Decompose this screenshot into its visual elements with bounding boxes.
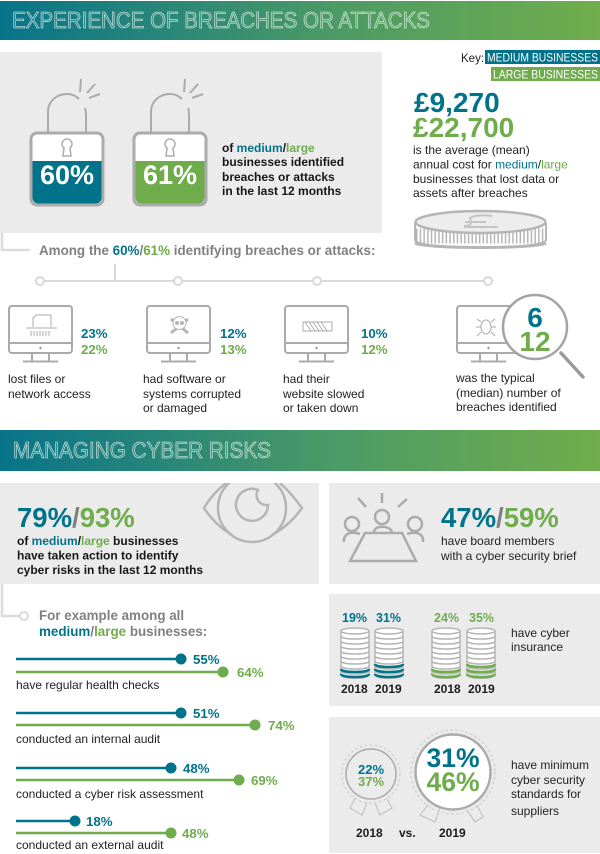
key: Key: [461,53,484,65]
text: share identifying breaches: breaches or attacks [222,170,335,184]
connector: panel to examples [2,584,28,620]
item: website slowed: or taken down [283,401,358,415]
item: median breaches [455,295,583,414]
subheading: for example: medium/large businesses: [39,624,207,639]
chart: external audit: 18% [86,814,113,829]
item: software corrupted: 12% [220,326,247,341]
rosette year labels [356,826,466,840]
text: average cost description: assets after breaches [413,186,528,200]
icon: padlock 60% [31,79,103,205]
chart: internal audit [16,706,295,746]
average cost figures [413,87,514,143]
item: software corrupted: had software or [143,372,226,386]
chart: external audit [16,814,209,852]
icon: rosette 2019: 46% [426,767,480,797]
banner title: MANAGING CYBER RISKS [13,437,271,463]
icon: rosette 2018 [342,745,400,815]
icon: rosette 2018: 22% [358,762,384,777]
icon: rosette 2019: 31% [426,743,480,773]
text: average cost description: is the average (mean) [413,143,530,157]
text: action description: cyber risks in the last 12 months [17,563,203,577]
text: board description: with a cyber security brief [440,549,577,563]
timeline connector [36,264,492,285]
icon: eye [204,474,302,542]
item: website slowed: 10% [361,326,388,341]
icon: magnifier with medians: 6 [527,302,543,333]
chart: large businesses stacks: 24% [434,611,459,625]
text: action description: of medium/large businesses [17,534,178,548]
item: lost files [8,306,108,401]
chart: large businesses stacks: 2018 [434,682,461,696]
chart: medium businesses stacks [341,611,403,696]
icon: monitor with shredder [9,306,72,362]
chart: medium businesses stacks: 31% [376,611,401,625]
icon: monitor with progress bar [285,306,348,362]
text: minimum standards: standards for [511,787,581,801]
item: website slowed [282,306,388,415]
icon: magnifier with medians: 12 [519,326,551,357]
item: software corrupted: or damaged [143,401,207,415]
text: share identifying breaches: in the last 12 months [222,184,342,198]
item: software corrupted: systems corrupted [143,387,241,401]
chart: internal audit: 51% [193,706,220,721]
chart: medium businesses stacks: 2018 [341,682,368,696]
text: share identifying breaches: businesses identified [222,155,344,169]
chart: large businesses stacks: 2019 [468,682,495,696]
subheading: among the 60%/61%: Among the 60%/61% identifying breaches or attacks: [39,243,375,258]
chart: regular health checks: have regular health checks [16,678,159,692]
icon: monitor with bug [457,306,520,362]
text: board description: have board members [441,534,554,548]
icon: board meeting [344,493,423,561]
chart: internal audit: conducted an internal audit [16,732,161,746]
panel: taken action [0,474,319,584]
chart: regular health checks: 64% [237,665,264,680]
icon: monitor with skull [147,306,210,362]
text: minimum standards: suppliers [511,804,559,818]
text: action description: have taken action to identify [17,548,179,562]
item: median breaches: (median) number of [456,386,561,400]
banner title: EXPERIENCE OF BREACHES OR ATTACKS [12,7,430,33]
chart: internal audit: 74% [268,718,295,733]
chart: cyber risk assessment: 69% [251,773,278,788]
item: software corrupted: 13% [220,342,247,357]
text: minimum standards: cyber security [511,773,585,787]
icon: rosette 2019 [411,730,495,822]
chart: regular health checks [16,652,264,692]
rosette year labels: 2019 [439,826,466,840]
rosette year labels: 2018 [356,826,383,840]
text: average cost description: annual cost for medium/large [413,158,568,172]
rosette year labels: vs. [399,826,416,840]
key [461,50,600,82]
chart: cyber risk assessment: 48% [183,761,210,776]
chart: medium businesses stacks: 2019 [375,682,402,696]
chart: external audit: 48% [182,826,209,841]
panel: taken action: 79%/93% [17,502,135,533]
average cost figures: £9,270 [414,87,500,118]
average cost figures: £22,700 [413,112,514,143]
icon: magnifier with medians [503,295,583,377]
chart: cyber risk assessment: conducted a cyber risk assessment [16,787,204,801]
item: software corrupted [143,306,247,415]
panel: board members: 47%/59% [441,502,559,533]
chart: cyber risk assessment [16,761,278,801]
panel: cyber insurance [329,594,600,706]
icon: padlock 61% [134,79,206,205]
text: minimum standards: have minimum [511,758,589,772]
panel: board members [329,483,600,584]
item: website slowed: 12% [361,342,388,357]
panel: breaches identified [0,52,382,233]
icon: padlock 60%: 60% [40,160,94,190]
item: website slowed: had their [283,372,330,386]
text: average cost description: businesses that lost data or [413,172,559,186]
connector: panel to subheading [2,233,30,250]
chart: regular health checks: 55% [193,652,220,667]
item: lost files: network access [8,387,91,401]
chart: external audit: conducted an external audit [16,838,164,852]
chart: medium businesses stacks: 19% [342,611,367,625]
item: lost files: 22% [81,342,108,357]
banner: managing cyber risks [0,430,600,471]
subheading: for example: For example among all [39,608,184,623]
item: lost files: lost files or [8,372,65,386]
item: median breaches: was the typical [455,371,535,385]
banner: experience of breaches or attacks [0,1,600,40]
text: have cyber insurance: have cyber [511,626,570,640]
chart: large businesses stacks [432,611,495,696]
icon: padlock 61%: 61% [143,160,197,190]
chart: large businesses stacks: 35% [469,611,494,625]
panel: supplier standards [329,717,600,853]
item: lost files: 23% [81,326,108,341]
icon: pound coin [415,211,546,248]
item: website slowed: website slowed [282,387,364,401]
icon: rosette 2018: 37% [358,774,384,789]
item: median breaches: breaches identified [456,400,557,414]
text: have cyber insurance: insurance [511,640,563,654]
text: share identifying breaches: of medium/large [222,141,315,155]
